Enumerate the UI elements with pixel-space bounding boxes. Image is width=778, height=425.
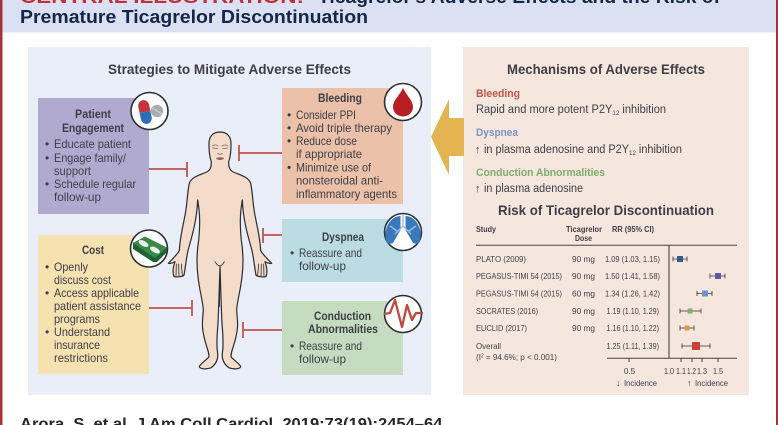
- panel: bleeding: if appropriate: [296, 147, 362, 161]
- row: SOCRATES: SOCRATES (2016): [476, 306, 538, 316]
- row: PEGASUS-TIMI 54 90 mg: PEGASUS-TIMI 54 (2015): [476, 271, 562, 281]
- row: overall: 2: [481, 354, 484, 360]
- panel: dyspnea: follow-up: [299, 259, 346, 273]
- row: overall: = 94.6%; p < 0.001): [484, 352, 557, 362]
- mechanism: bleeding: 12: [612, 110, 620, 117]
- mechanism: bleeding: Rapid and more potent P2Y: [476, 104, 618, 116]
- row: PLATO: 1.09 (1.03, 1.15): [605, 254, 660, 264]
- x axis: 1.1: [676, 366, 686, 376]
- title banner: Premature Ticagrelor Discontinuation: [20, 7, 368, 27]
- x axis: 1.0: [664, 366, 674, 376]
- panel: dyspnea: Dyspnea: [322, 230, 364, 244]
- row: PEGASUS-TIMI 54 90 mg: [476, 271, 725, 281]
- icon: pills: [131, 92, 168, 130]
- row: PLATO: PLATO (2009): [476, 254, 526, 264]
- icon: lungs: [384, 214, 422, 250]
- panel: cost: •: [45, 260, 49, 274]
- panel: cost: patient assistance: [54, 299, 141, 313]
- panel: bleeding: Bleeding: [318, 91, 362, 105]
- mechanism: dyspnea: in plasma adenosine and P2Y: [484, 144, 637, 156]
- x axis: [607, 358, 737, 388]
- panel: cost: Understand: [54, 325, 110, 339]
- mechanism: bleeding: Bleeding: [476, 88, 520, 100]
- x axis: Incidence: [624, 378, 657, 388]
- forest plot: [476, 225, 737, 388]
- panel: patient engagement: Engage family/: [54, 151, 127, 165]
- panel: bleeding: Avoid triple therapy: [296, 121, 392, 135]
- row: PEGASUS-TIMI 54 90 mg: 1.50 (1.41, 1.58): [605, 271, 660, 281]
- panel: cost: Openly: [54, 260, 88, 274]
- row: PEGASUS-TIMI 54 60 mg: [476, 288, 712, 298]
- x axis: ↓: [616, 378, 620, 388]
- x axis: ↑: [687, 378, 692, 388]
- mechanism: conduction abnormalities: Conduction Abnormalities: [476, 167, 605, 179]
- inhibition bar: patient engagement: [149, 162, 187, 177]
- panel: patient engagement: Engagement: [62, 121, 124, 135]
- panel: patient engagement: Patient: [75, 107, 111, 121]
- panel: dyspnea: Reassure and: [299, 246, 362, 260]
- panel: cost: •: [45, 325, 49, 339]
- row: overall: 1.25 (1.11, 1.39): [606, 341, 659, 351]
- mechanism: conduction abnormalities: in plasma adenosine: [484, 183, 583, 195]
- panel: cost: Cost: [82, 243, 104, 257]
- panel: dyspnea: •: [290, 246, 294, 260]
- heading: strategies: Strategies to Mitigate Adverse Effects: [108, 62, 351, 77]
- mechanism: dyspnea: [475, 127, 682, 157]
- panel: conduction abnormalities: Reassure and: [299, 339, 362, 353]
- panel: patient engagement: •: [45, 137, 49, 151]
- panel: patient engagement: Schedule regular: [54, 177, 136, 191]
- mechanism: bleeding: inhibition: [619, 104, 666, 116]
- row: EUCLID: EUCLID (2017): [476, 323, 527, 333]
- heading: mechanisms: Mechanisms of Adverse Effects: [507, 61, 705, 77]
- row: overall: (I: [476, 352, 481, 362]
- heading: risk of discontinuation: Risk of Ticagrelor Discontinuation: [498, 202, 714, 218]
- mechanism: dyspnea: Dyspnea: [476, 127, 519, 139]
- inhibition bar: cost: [149, 300, 192, 316]
- panel: bleeding: inflammatory agents: [296, 187, 397, 201]
- row: PEGASUS-TIMI 54 60 mg: 60 mg: [572, 288, 595, 298]
- row: EUCLID: 90 mg: [572, 323, 595, 333]
- row: EUCLID: 1.16 (1.10, 1.22): [606, 323, 659, 333]
- mechanism: bleeding: [476, 88, 666, 117]
- mechanism: dyspnea: 12: [629, 150, 636, 157]
- panel: cost: Access applicable: [54, 286, 139, 300]
- panel: bleeding: •: [287, 121, 291, 135]
- panel: cost: [38, 235, 149, 374]
- inhibition bar: conduction abnormalities: [243, 322, 282, 338]
- panel: bleeding: Minimize use of: [296, 160, 372, 174]
- table header: Study: [476, 225, 497, 234]
- panel: dyspnea: [282, 219, 403, 282]
- inhibition bar: dyspnea: [263, 228, 282, 243]
- row: SOCRATES: 1.19 (1.10, 1.29): [606, 306, 659, 316]
- row: PEGASUS-TIMI 54 90 mg: 90 mg: [572, 271, 595, 281]
- panel: cost: programs: [54, 312, 100, 326]
- panel: bleeding: •: [287, 108, 291, 122]
- row: overall: Overall: [476, 341, 501, 351]
- row: PEGASUS-TIMI 54 60 mg: 1.34 (1.26, 1.42): [605, 288, 660, 298]
- panel: strategies to mitigate adverse effects: [28, 47, 431, 395]
- inhibition bar: bleeding: [239, 145, 282, 161]
- panel: patient engagement: Educate patient: [54, 137, 132, 151]
- panel: patient engagement: •: [45, 177, 49, 191]
- row: EUCLID: [476, 323, 694, 333]
- mechanism: dyspnea: ↑: [475, 144, 480, 156]
- panel: bleeding: [282, 88, 403, 204]
- row: overall: [476, 341, 710, 362]
- icon: blood drop: [384, 84, 422, 120]
- x axis: 0.5: [624, 366, 635, 376]
- panel: cost: •: [45, 286, 49, 300]
- panel: bleeding: •: [287, 134, 291, 148]
- panel: patient engagement: support: [54, 164, 92, 178]
- table header: RR (95% CI): [612, 225, 654, 234]
- icon: ECG waveform: [384, 296, 423, 332]
- arrow: mechanisms to strategies: [431, 99, 464, 175]
- icon: money: [130, 230, 168, 267]
- panel: conduction abnormalities: [282, 301, 403, 375]
- panel: bleeding: Consider PPI: [296, 108, 356, 122]
- x axis: 1.2: [687, 366, 696, 376]
- panel: cost: discuss cost: [54, 273, 112, 287]
- row: SOCRATES: [476, 306, 701, 316]
- panel: conduction abnormalities: Abnormalities: [308, 322, 378, 336]
- panel: cost: restrictions: [54, 351, 108, 365]
- panel: bleeding: •: [287, 160, 291, 174]
- panel: cost: insurance: [54, 338, 100, 352]
- mechanism: dyspnea: inhibition: [636, 144, 682, 156]
- title banner: [2, 0, 776, 32]
- x axis: 1.3: [697, 366, 707, 376]
- panel: patient engagement: •: [45, 151, 49, 165]
- table header: Ticagrelor: [566, 225, 602, 234]
- row: SOCRATES: 90 mg: [572, 306, 595, 316]
- row: PLATO: 90 mg: [572, 254, 595, 264]
- table header: [476, 225, 654, 243]
- panel: bleeding: Reduce dose: [296, 134, 357, 148]
- row: PEGASUS-TIMI 54 60 mg: PEGASUS-TIMI 54 (2015): [476, 288, 562, 298]
- body figure: [168, 132, 272, 369]
- panel: patient engagement: [38, 98, 149, 214]
- panel: mechanisms of adverse effects: [463, 47, 749, 395]
- panel: conduction abnormalities: Conduction: [314, 309, 371, 323]
- mechanism: conduction abnormalities: [475, 167, 605, 195]
- panel: conduction abnormalities: •: [290, 339, 294, 353]
- table header: Dose: [575, 234, 593, 243]
- x axis: 1.5: [713, 366, 723, 376]
- mechanism: conduction abnormalities: ↑: [475, 183, 480, 195]
- panel: patient engagement: follow-up: [54, 190, 101, 204]
- row: PLATO: [476, 254, 687, 264]
- panel: conduction abnormalities: follow-up: [299, 352, 346, 366]
- x axis: Incidence: [695, 378, 728, 388]
- panel: bleeding: nonsteroidal anti-: [296, 174, 383, 188]
